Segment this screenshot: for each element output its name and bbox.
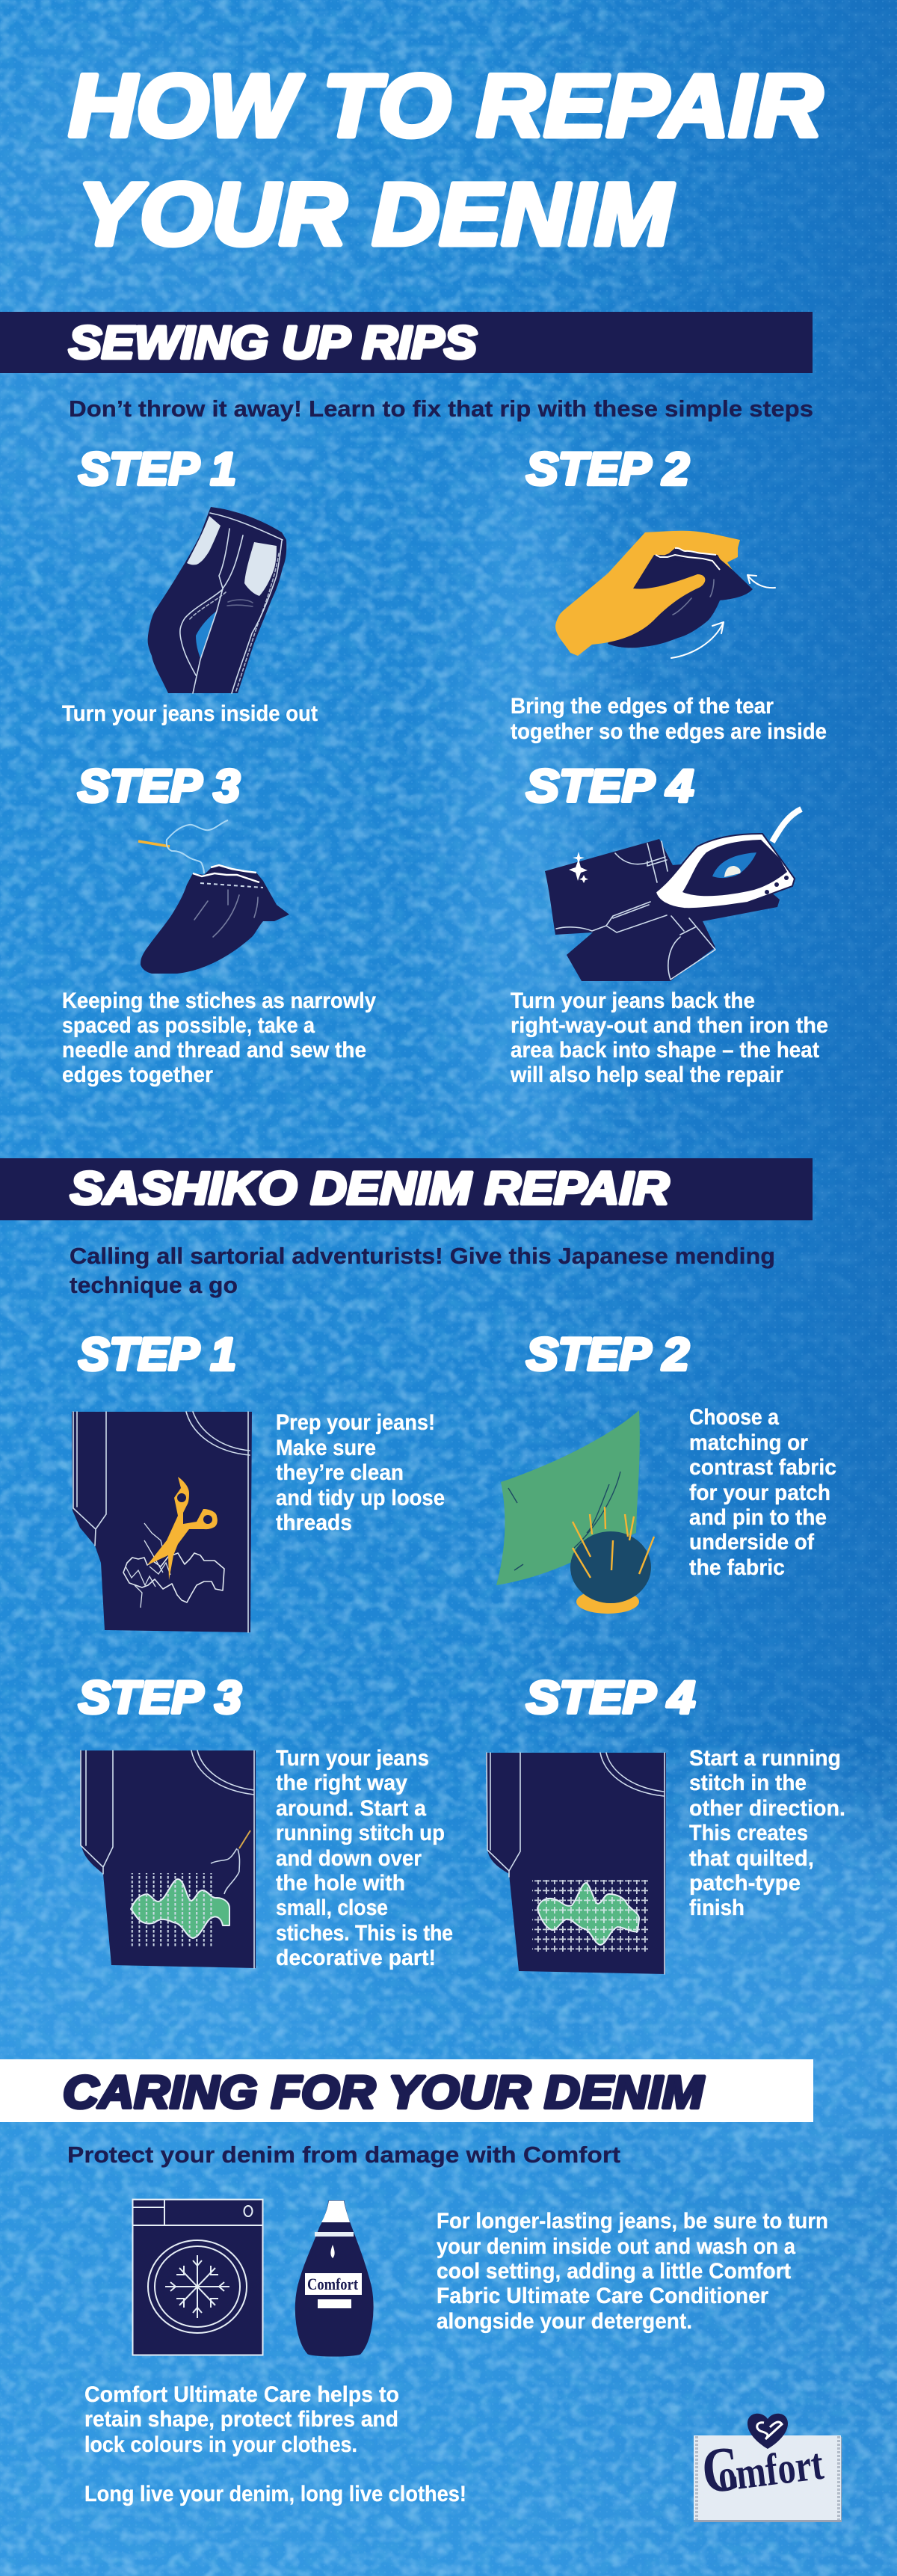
caption: finish — [689, 1896, 745, 1920]
caption: right-way-out and then iron the — [511, 1013, 828, 1038]
panel: rips step 2 — [511, 443, 827, 744]
caption: Start a running — [689, 1746, 841, 1771]
logo: Comfort label: Comfort — [698, 2422, 827, 2507]
caption: small, close — [276, 1896, 388, 1920]
caption — [689, 1405, 836, 1580]
heading: step 2: STEP 2 — [526, 1329, 689, 1380]
caption: Turn your jeans inside out — [62, 701, 318, 726]
panel: sashiko step 1 — [72, 1329, 445, 1632]
caption: Keeping the stiches as narrowly — [62, 989, 376, 1013]
icon: jeans with scissors and loose threads — [72, 1412, 252, 1632]
caption: and tidy up loose — [276, 1486, 445, 1510]
caption: area back into shape – the heat — [511, 1038, 819, 1063]
caption: needle and thread and sew the — [62, 1038, 366, 1063]
title: YOUR DENIM — [78, 165, 674, 264]
panel: rips step 4 — [510, 760, 828, 1087]
heading: step 3: STEP 3 — [78, 1672, 241, 1723]
caption: Turn your jeans back the — [511, 989, 755, 1013]
section banner: sewing up rips — [0, 312, 813, 373]
caption: that quilted, — [689, 1846, 814, 1871]
icon: jeans with quilted stitched patch — [486, 1753, 666, 1974]
caption: running stitch up — [276, 1821, 445, 1845]
caption: and down over — [276, 1846, 422, 1871]
panel: rips step 3 — [62, 760, 376, 1087]
caption: will also help seal the repair — [510, 1063, 783, 1087]
heading: step 3: STEP 3 — [78, 760, 240, 811]
heading: step 4: STEP 4 — [526, 1672, 695, 1723]
panel: sashiko step 3 — [78, 1672, 453, 1970]
icon: jeans with running stitch over patch — [80, 1750, 256, 1968]
caption — [276, 1410, 445, 1535]
caption — [511, 694, 827, 744]
intro text: sashiko: Calling all sartorial adventurists! Give this Japanese mending — [70, 1243, 775, 1269]
caption: other direction. — [689, 1796, 845, 1821]
text block: product benefits: retain shape, protect fibres and — [84, 2407, 398, 2432]
logo: Comfort label — [694, 2414, 842, 2522]
section banner: sashiko denim repair — [0, 1158, 813, 1220]
text block: wash advice: your denim inside out and wash on a — [437, 2234, 795, 2259]
panel: sashiko step 4 — [486, 1672, 845, 1974]
icon: Comfort bottle — [295, 2201, 373, 2356]
icon: jeans inside out — [148, 507, 286, 693]
panel: sashiko step 2 — [496, 1329, 836, 1614]
caption: Prep your jeans! — [276, 1410, 435, 1435]
caption: Turn your jeans — [276, 1746, 429, 1771]
caption: the hole with — [276, 1871, 405, 1896]
caption: around. Start a — [276, 1796, 426, 1821]
text block: wash advice: cool setting, adding a little Comfort — [437, 2259, 791, 2284]
text block: product benefits: lock colours in your clothes. — [84, 2432, 357, 2457]
caption — [689, 1746, 845, 1920]
intro text: caring: Protect your denim from damage with Comfort — [67, 2142, 620, 2168]
caption: matching or — [689, 1430, 808, 1455]
text block: product benefits: Long live your denim, long live clothes! — [84, 2482, 466, 2506]
text block: wash advice: Fabric Ultimate Care Conditioner — [437, 2284, 768, 2308]
caption: they’re clean — [276, 1460, 404, 1485]
text block: wash advice — [437, 2209, 828, 2334]
heading: step 4: STEP 4 — [526, 760, 694, 811]
heading: step 1: STEP 1 — [78, 1329, 236, 1380]
caption — [62, 989, 376, 1087]
caption: stitch in the — [689, 1771, 807, 1795]
icon: iron on jeans — [545, 809, 801, 981]
heading: step 1: STEP 1 — [78, 443, 236, 494]
caption: underside of — [689, 1530, 815, 1555]
caption: Bring the edges of the tear — [511, 694, 774, 719]
caption: contrast fabric — [689, 1455, 836, 1480]
section banner: caring for your denim: CARING FOR YOUR DENIM — [63, 2067, 704, 2118]
heading: step 2: STEP 2 — [526, 443, 689, 494]
icon: hand folding fabric — [555, 531, 775, 658]
icon: fabric patch and pin cushion — [496, 1410, 654, 1614]
caption — [276, 1746, 453, 1970]
text block: product benefits — [84, 2382, 466, 2506]
icon: needle and thread sewing — [138, 820, 289, 974]
caption: threads — [276, 1510, 352, 1535]
caption: the right way — [276, 1771, 407, 1795]
caption: stiches. This is the — [276, 1921, 453, 1946]
icon: Comfort bottle: Comfort — [307, 2275, 359, 2293]
caption — [510, 989, 828, 1087]
title: HOW TO REPAIR — [69, 57, 822, 156]
caption: for your patch — [689, 1481, 830, 1505]
text block: wash advice: alongside your detergent. — [437, 2309, 692, 2334]
title — [69, 57, 822, 264]
caption: spaced as possible, take a — [62, 1013, 315, 1038]
intro text: sashiko — [70, 1243, 775, 1298]
caption: decorative part! — [276, 1946, 436, 1970]
caption: Make sure — [276, 1436, 376, 1460]
panel: rips step 1 — [62, 443, 318, 726]
text block: product benefits: Comfort Ultimate Care helps to — [84, 2382, 399, 2407]
section banner: sewing up rips: SEWING UP RIPS — [69, 317, 477, 368]
caption: This creates — [689, 1821, 808, 1845]
caption: the fabric — [689, 1555, 785, 1580]
text block: wash advice: For longer-lasting jeans, be sure to turn — [437, 2209, 828, 2234]
intro text: sewing up rips: Don’t throw it away! Learn to fix that rip with these simple steps — [69, 396, 813, 422]
icon: washing machine with snowflake — [132, 2199, 263, 2355]
section banner: caring for your denim — [0, 2059, 813, 2122]
section banner: sashiko denim repair: SASHIKO DENIM REPAIR — [70, 1163, 669, 1214]
caption: Choose a — [689, 1405, 779, 1430]
caption: together so the edges are inside — [511, 719, 827, 744]
caption: patch-type — [689, 1871, 801, 1896]
caption: edges together — [62, 1063, 213, 1087]
caption: and pin to the — [689, 1505, 827, 1530]
intro text: sashiko: technique a go — [70, 1272, 238, 1298]
